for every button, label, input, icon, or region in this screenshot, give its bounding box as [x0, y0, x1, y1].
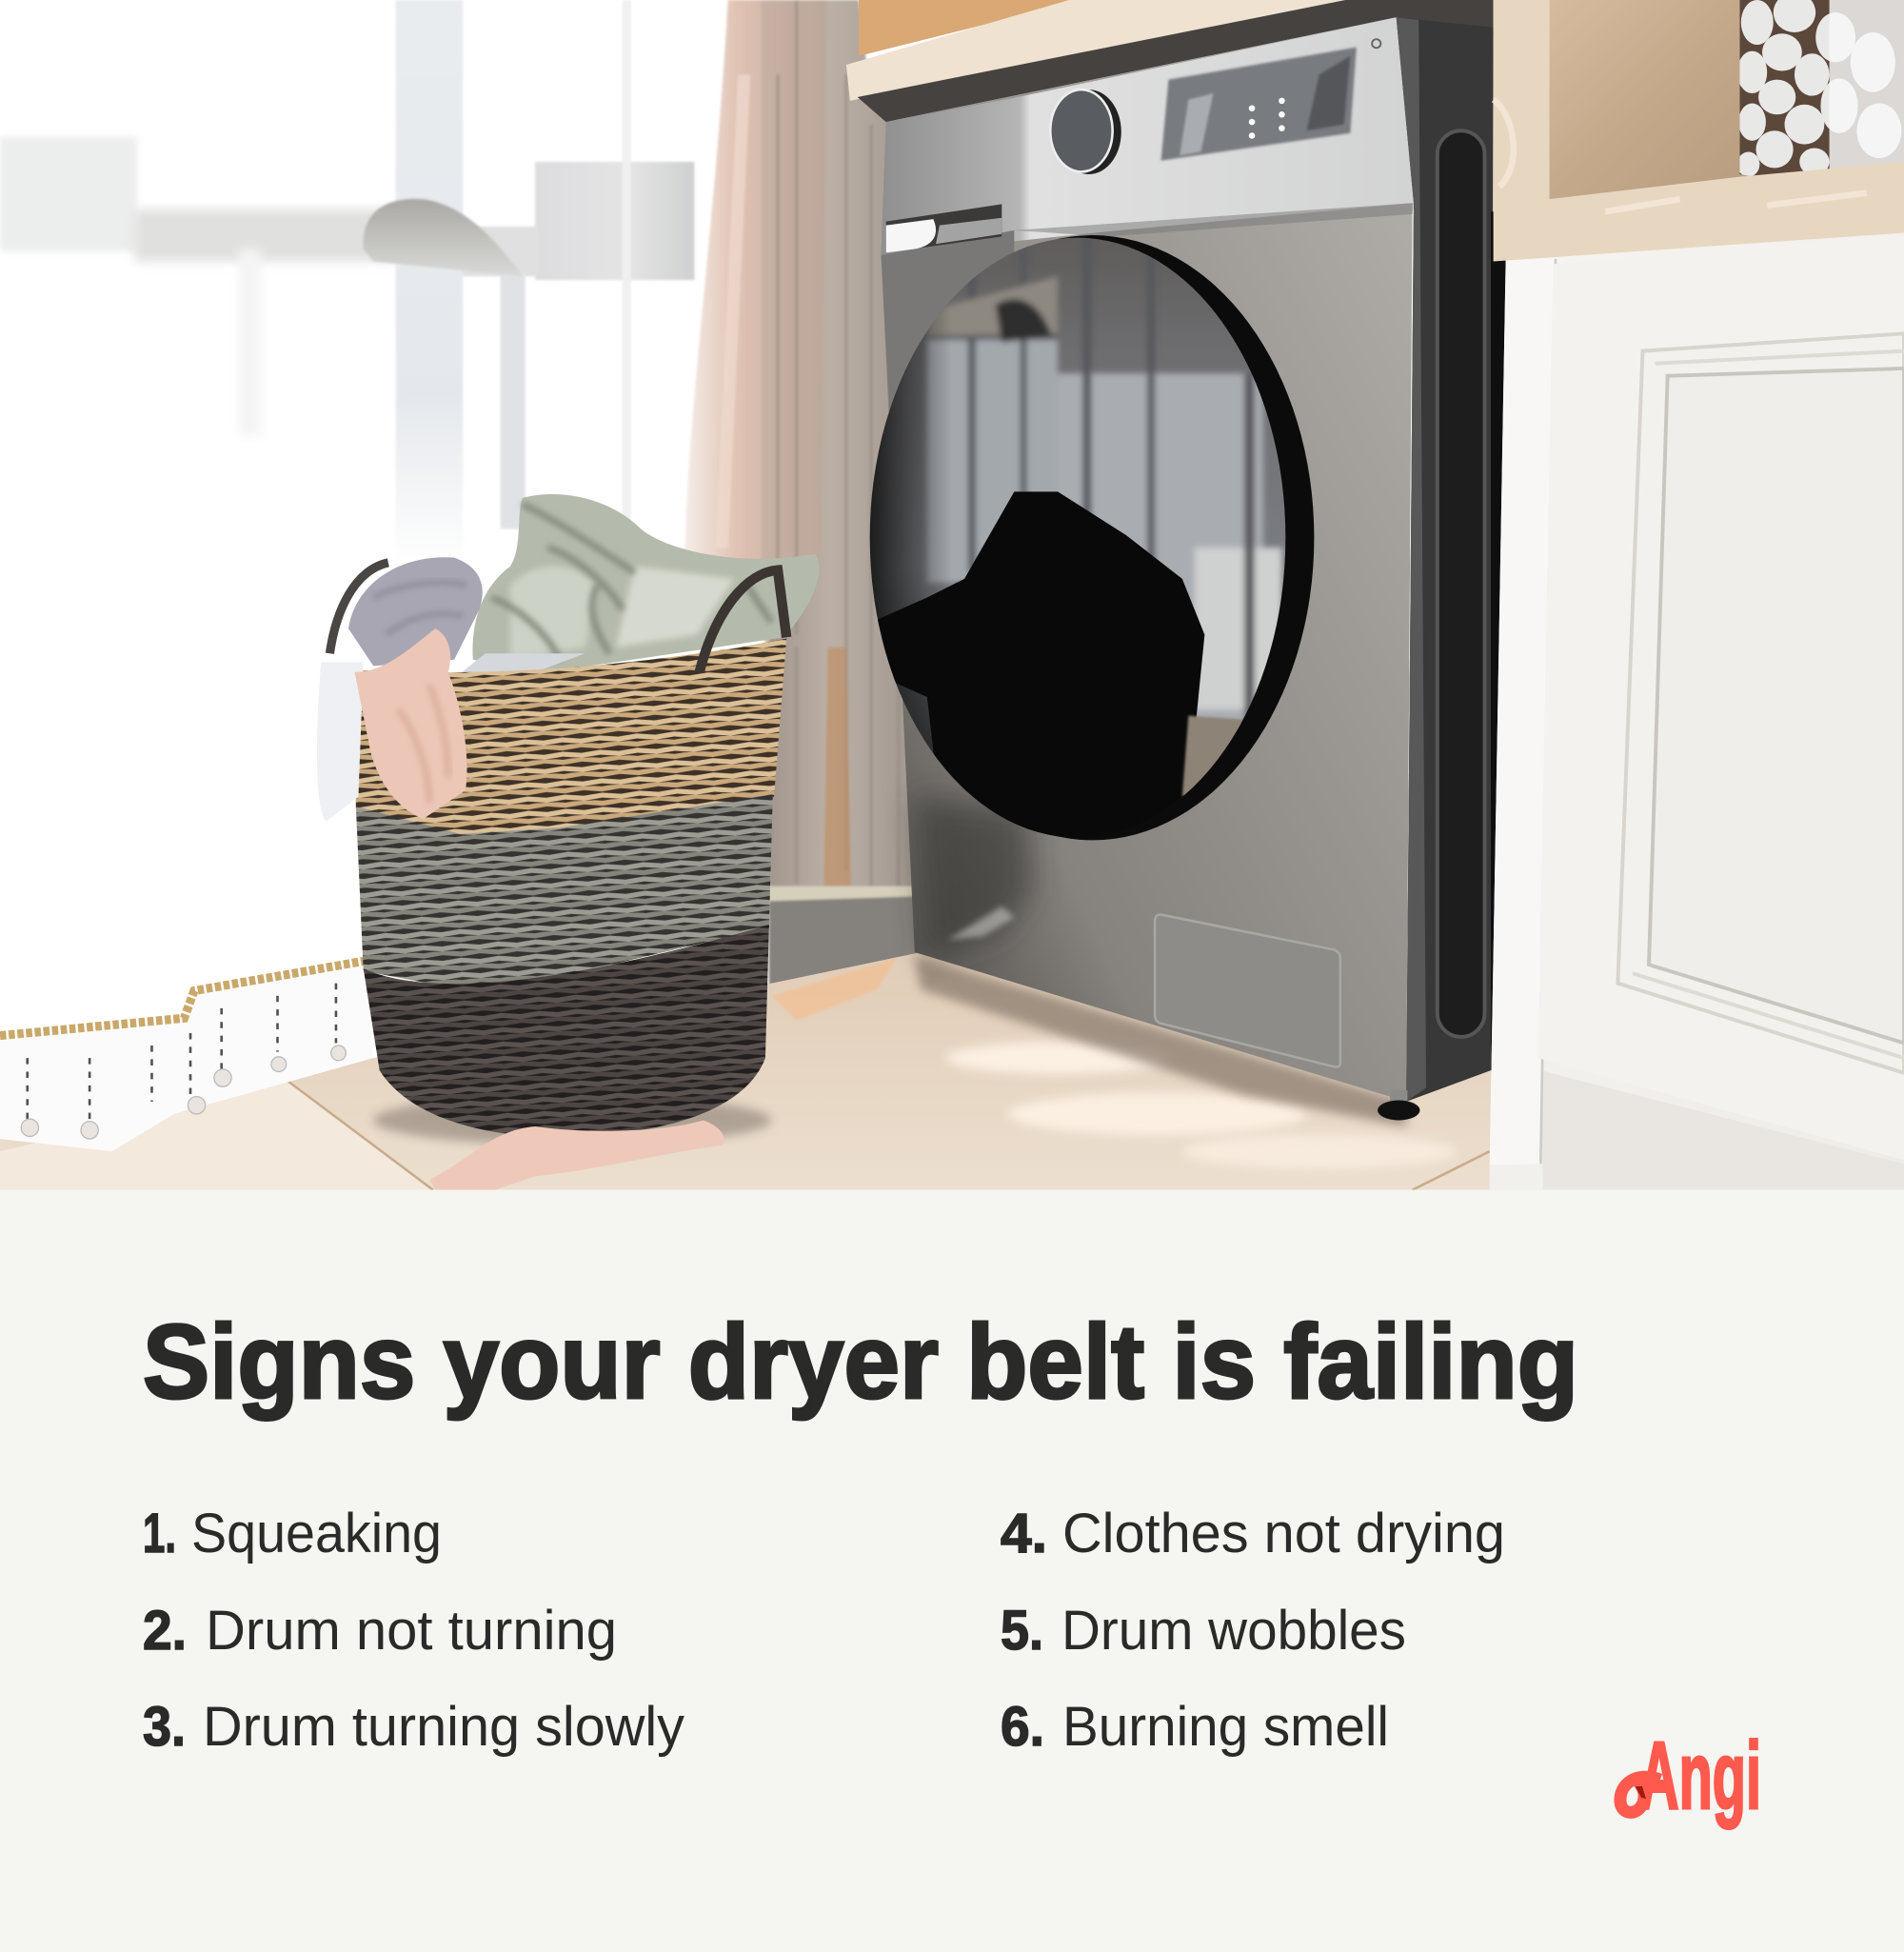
- item 4: Clothes not drying: [1062, 1503, 1505, 1564]
- list column 2: [1001, 1503, 1505, 1758]
- cabinet post: [1489, 261, 1540, 1165]
- fallen pink cloth: [429, 1120, 724, 1190]
- item 4: 4.: [1001, 1503, 1047, 1564]
- raised door panel: [1540, 263, 1557, 1060]
- item 6: 6.: [1001, 1696, 1044, 1758]
- list column 1: [143, 1503, 684, 1758]
- drawer handle: [886, 204, 1002, 252]
- pink cloth: [355, 628, 467, 819]
- item 6: Burning smell: [1062, 1696, 1389, 1758]
- item 2: Drum not turning: [206, 1600, 617, 1662]
- washing machine: [858, 0, 1508, 1120]
- cabinet: [1490, 0, 1904, 1190]
- foot: [1390, 1090, 1407, 1101]
- item 3: Drum turning slowly: [203, 1696, 684, 1758]
- window with sheer curtain: [0, 0, 694, 567]
- curtain behind shelf, top: [859, 0, 1082, 56]
- item 3: 3.: [143, 1696, 186, 1758]
- item 5: Drum wobbles: [1061, 1600, 1406, 1662]
- reflection on body: [915, 797, 1033, 959]
- door: [1053, 235, 1314, 840]
- photo: laundry room with basket and washer: [0, 0, 1904, 1190]
- display: [1161, 48, 1357, 161]
- floor: [0, 952, 1494, 1190]
- handles: [700, 570, 786, 672]
- item 5: 5.: [1001, 1600, 1043, 1662]
- heading: Signs your dryer belt is failing: [143, 1304, 1578, 1421]
- logo: Angi: [1620, 1723, 1761, 1829]
- filter cover: [1155, 915, 1340, 1067]
- shelf above washer: [846, 0, 1345, 101]
- logo: Angi: Angi: [1639, 1723, 1761, 1829]
- vase: [1737, 0, 1904, 181]
- laundry basket: [317, 494, 819, 1190]
- curtain: [684, 0, 923, 989]
- white cloth: [317, 662, 364, 822]
- marble shelf and niche: [1549, 0, 1749, 206]
- dial: [1081, 90, 1121, 174]
- basket shadow: [373, 1095, 771, 1145]
- control panel: [881, 17, 1414, 255]
- item 1: 1.: [143, 1503, 176, 1564]
- item 2: 2.: [143, 1600, 187, 1662]
- item 1: Squeaking: [191, 1503, 442, 1564]
- dark side panel: [1397, 17, 1494, 1102]
- basket bands: [355, 639, 786, 836]
- sheer curtain hem with beads: [0, 961, 373, 1151]
- clothes pile: [472, 494, 819, 672]
